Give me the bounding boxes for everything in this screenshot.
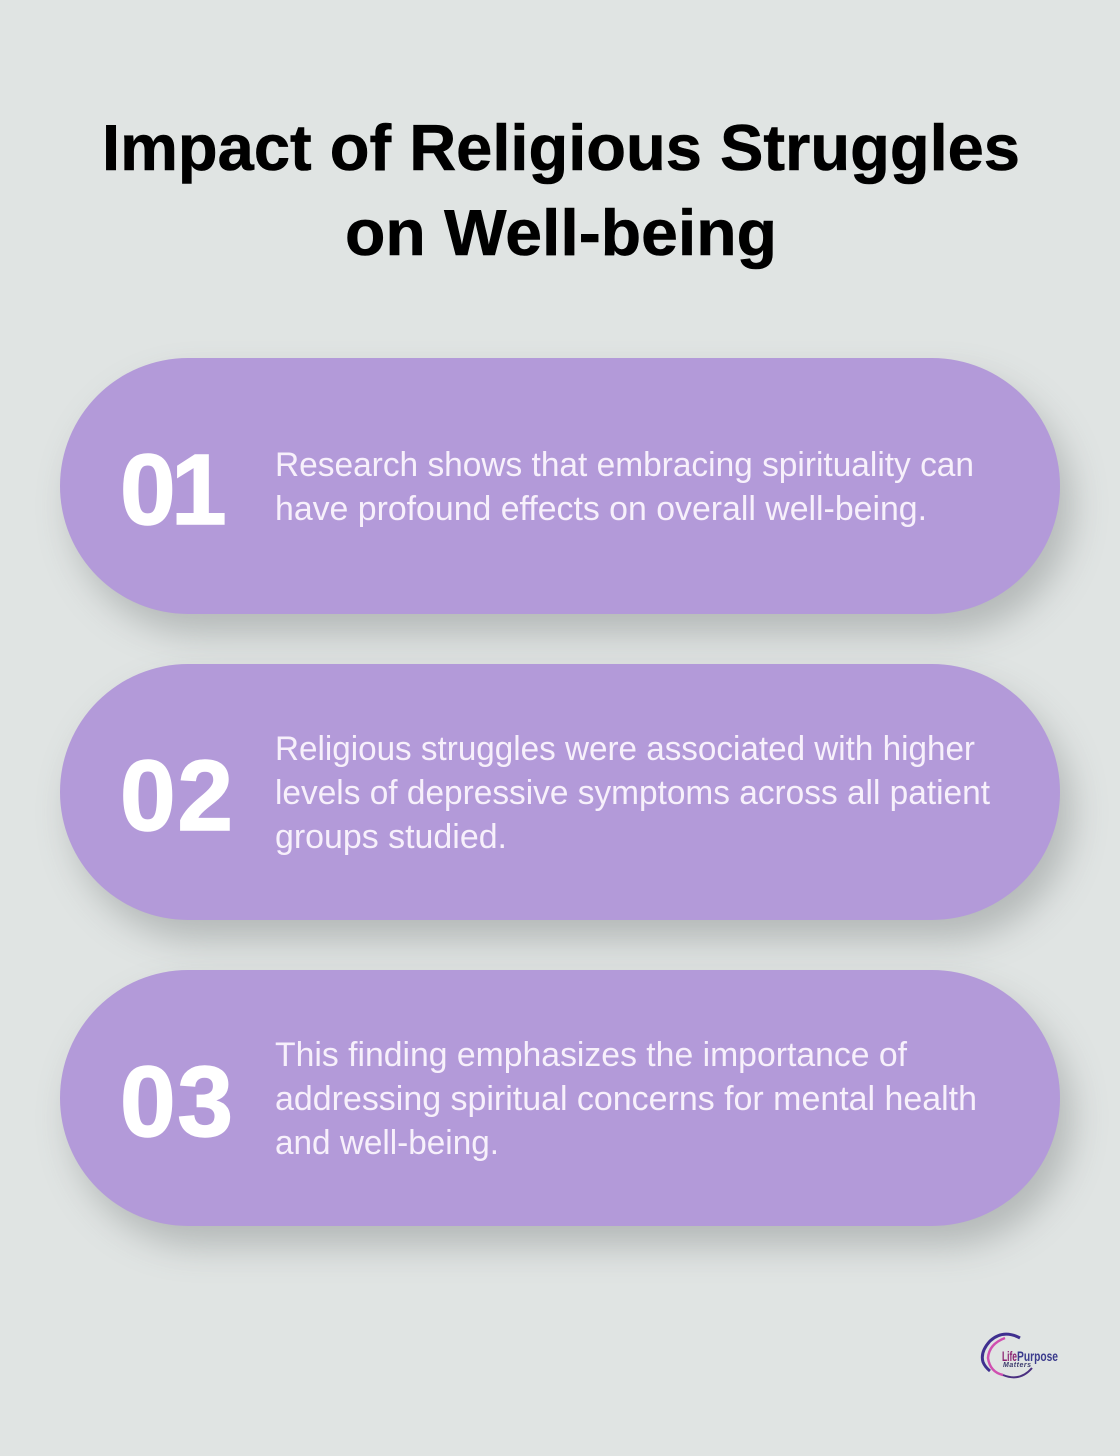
step 01 number xyxy=(120,434,227,546)
icon: Life Purpose Matters logo xyxy=(982,1334,1058,1377)
title: on Well-being xyxy=(345,196,777,269)
step 02 number: 02 xyxy=(120,740,233,852)
step 03 text xyxy=(275,1036,977,1162)
step 02 text: groups studied. xyxy=(275,818,507,856)
panel: step 02 background xyxy=(60,664,1060,920)
step 01 text: have profound effects on overall well-being. xyxy=(275,490,927,528)
panel: step 03 background xyxy=(60,970,1060,1226)
icon: Life Purpose Matters logo: Life xyxy=(1002,1348,1017,1364)
step 01 text xyxy=(275,446,974,528)
step 01 number: 0 xyxy=(120,434,176,546)
step 03 text: and well-being. xyxy=(275,1124,499,1162)
title xyxy=(102,111,1020,269)
step 02 text xyxy=(275,730,991,856)
step 01 number: 1 xyxy=(171,434,227,546)
panel: step 01 background xyxy=(60,358,1060,614)
title: Impact of Religious Struggles xyxy=(102,111,1020,184)
step 03 text: This finding emphasizes the importance of xyxy=(275,1036,908,1074)
icon: Life Purpose Matters logo: Purpose xyxy=(1017,1348,1058,1364)
step 03 text: addressing spiritual concerns for mental health xyxy=(275,1080,977,1118)
step 02 text: levels of depressive symptoms across all patient xyxy=(275,774,991,812)
step 02 text: Religious struggles were associated with higher xyxy=(275,730,975,768)
step 01 text: Research shows that embracing spirituality can xyxy=(275,446,974,484)
step 03 number: 03 xyxy=(120,1046,233,1158)
icon: Life Purpose Matters logo: Matters xyxy=(1003,1362,1031,1369)
